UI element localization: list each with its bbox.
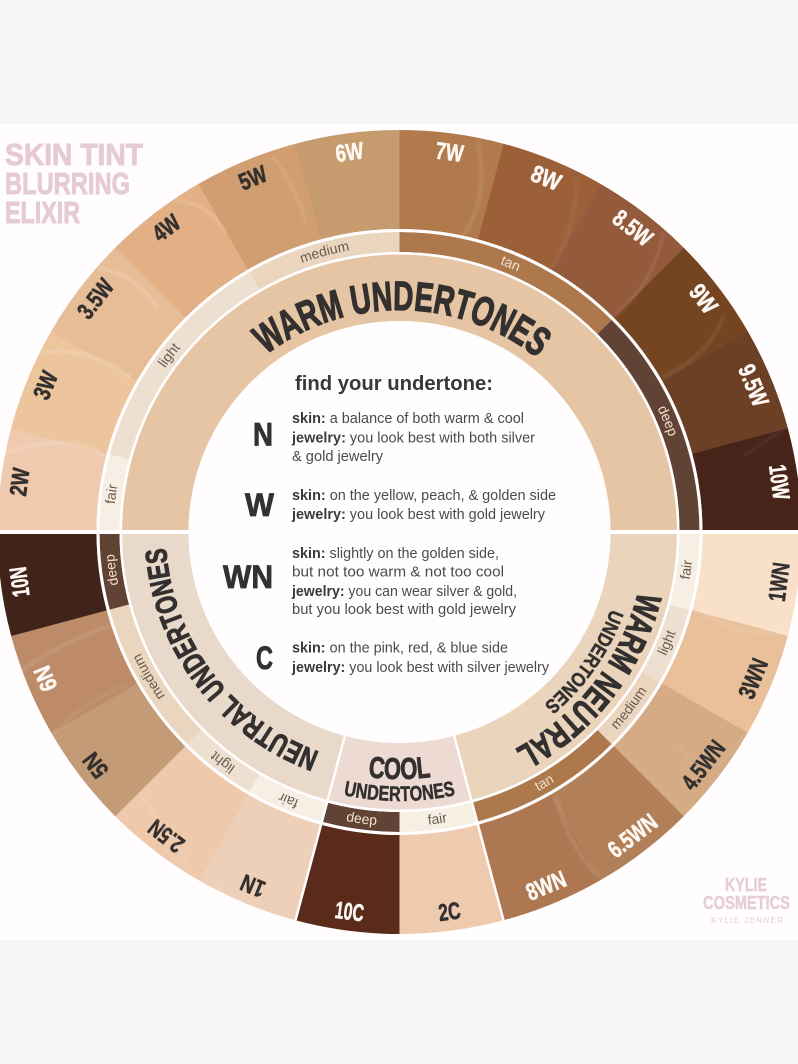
swatch: 6N bbox=[11, 610, 137, 733]
swatch: 2.5N bbox=[115, 746, 248, 880]
swatch: 6.5WN bbox=[551, 746, 684, 880]
swatch: 2C: 2C bbox=[437, 897, 462, 927]
swatch: 6W: 6W bbox=[334, 138, 365, 168]
warm range: tan bbox=[400, 232, 612, 334]
entry: N: N bbox=[253, 416, 273, 452]
swatch: 3.5W: 3.5W bbox=[72, 274, 120, 324]
swatch: 5N: 5N bbox=[78, 747, 114, 783]
warm range: deep bbox=[598, 320, 700, 530]
entry: N: & gold jewelry bbox=[292, 449, 384, 465]
warm neutral range: tan bbox=[473, 730, 612, 822]
swatch: 1N: 1N bbox=[237, 868, 269, 902]
swatch: 3W: 3W bbox=[28, 367, 64, 404]
neutral range: light: light bbox=[210, 751, 235, 774]
swatch: 10C bbox=[295, 825, 400, 934]
swatch: 4W: 4W bbox=[147, 209, 186, 248]
swatch: 9.5W bbox=[662, 331, 788, 454]
panel: cool undertones bbox=[329, 736, 470, 810]
entry: W: W bbox=[245, 487, 275, 523]
swatch: 8.5W: 8.5W bbox=[607, 205, 658, 253]
entry: C: jewelry: you look best with silver jewelry bbox=[291, 660, 550, 676]
cool range: deep bbox=[323, 802, 400, 832]
panel: cool undertones: COOL bbox=[370, 756, 431, 780]
swatch: 7W: 7W bbox=[434, 138, 465, 168]
swatch: 10W bbox=[692, 428, 798, 532]
range bands and undertone rings bbox=[0, 229, 798, 921]
entry: N: jewelry: you look best with both silver bbox=[291, 430, 535, 446]
swatch: 4.5WN: 4.5WN bbox=[676, 735, 731, 795]
brand title: skin tint blurring elixir: SKIN TINT bbox=[5, 137, 143, 172]
swatch: 9W bbox=[614, 248, 748, 380]
swatch: 10N: 10N bbox=[5, 565, 36, 599]
swatch: 5W bbox=[198, 144, 321, 270]
panel: warm undertones bbox=[122, 254, 677, 530]
neutral range: light bbox=[188, 730, 260, 792]
entry: WN: skin: slightly on the golden side, bbox=[292, 546, 499, 562]
panel: warm neutral undertones: UNDERTONES bbox=[546, 611, 624, 714]
warm range: light bbox=[110, 272, 260, 460]
entry: C bbox=[256, 640, 550, 676]
swatch: 3WN bbox=[662, 610, 788, 733]
entry: C: C bbox=[256, 640, 273, 676]
swatch: 2W: 2W bbox=[5, 466, 36, 498]
swatch: 1WN: 1WN bbox=[764, 561, 796, 603]
warm range: deep: deep bbox=[658, 406, 676, 436]
swatch: 6.5WN: 6.5WN bbox=[603, 809, 663, 864]
neutral range: deep bbox=[100, 534, 129, 610]
entry: W: skin: on the yellow, peach, & golden side bbox=[292, 488, 556, 504]
logo: kylie cosmetics: KYLIE JENNER bbox=[711, 916, 783, 925]
swatch: 10C: 10C bbox=[333, 897, 366, 927]
swatch: 8.5W bbox=[551, 184, 684, 318]
swatch: 7W bbox=[400, 130, 504, 239]
color wheel bbox=[0, 130, 798, 934]
entry: C: skin: on the pink, red, & blue side bbox=[292, 640, 508, 656]
swatch: 5N bbox=[51, 684, 185, 816]
neutral range: medium bbox=[110, 604, 202, 744]
entry: W bbox=[245, 487, 556, 523]
heading: find your undertone: bbox=[295, 373, 493, 395]
entry: WN: but not too warm & not too cool bbox=[292, 564, 504, 580]
warm range: medium bbox=[250, 232, 400, 290]
swatch: 9W: 9W bbox=[683, 279, 723, 319]
warm neutral range: tan: tan bbox=[534, 776, 554, 790]
neutral range: fair bbox=[250, 774, 326, 822]
brand title: skin tint blurring elixir: ELIXIR bbox=[5, 195, 80, 230]
warm neutral range: medium bbox=[598, 672, 659, 744]
swatch: 8WN: 8WN bbox=[522, 866, 570, 907]
warm neutral range: fair: fair bbox=[680, 560, 692, 579]
cool range: fair bbox=[400, 803, 476, 832]
warm neutral range: medium: medium bbox=[612, 688, 646, 730]
swatch: 3W bbox=[11, 331, 137, 454]
brand title: skin tint blurring elixir bbox=[5, 137, 143, 230]
warm neutral range: light bbox=[642, 604, 689, 682]
swatch: 8W: 8W bbox=[527, 160, 565, 197]
swatch: 5W: 5W bbox=[235, 161, 271, 196]
swatch: 2C bbox=[400, 825, 504, 934]
swatch: 1WN bbox=[692, 532, 798, 636]
swatch: 8WN bbox=[478, 794, 600, 920]
swatch: 9.5W: 9.5W bbox=[732, 361, 774, 411]
panel: cool undertones: UNDERTONES bbox=[344, 780, 454, 802]
panel: warm neutral undertones: WARM NEUTRAL bbox=[515, 595, 662, 766]
entry: WN: jewelry: you can wear silver & gold, bbox=[291, 584, 517, 600]
brand title: skin tint blurring elixir: BLURRING bbox=[5, 166, 130, 201]
cool range: fair: fair bbox=[428, 812, 446, 824]
swatch: 4.5WN bbox=[614, 684, 748, 816]
warm range: light: light bbox=[157, 343, 180, 368]
swatch: 10W: 10W bbox=[763, 463, 794, 501]
warm neutral range: light: light bbox=[657, 630, 676, 656]
entry: WN: but you look best with gold jewelry bbox=[292, 602, 517, 618]
swatch: 8W bbox=[478, 144, 600, 270]
swatch: 3.5W bbox=[51, 248, 185, 380]
entry: N bbox=[253, 411, 535, 465]
entry: WN bbox=[223, 546, 517, 618]
neutral range: fair: fair bbox=[278, 793, 298, 808]
cool range: deep: deep bbox=[346, 812, 376, 828]
panel: warm undertones: WARM UNDERTONES bbox=[249, 281, 551, 356]
entry: WN: WN bbox=[223, 559, 273, 595]
swatch: 2.5N: 2.5N bbox=[143, 813, 190, 858]
neutral range: deep: deep bbox=[107, 554, 118, 585]
panel: neutral undertones: NEUTRAL UNDERTONES bbox=[145, 548, 319, 772]
swatch: 3WN: 3WN bbox=[733, 655, 774, 703]
logo: kylie cosmetics: KYLIE bbox=[725, 875, 767, 895]
entry: W: jewelry: you look best with gold jewelry bbox=[291, 507, 546, 523]
swatch: 1N bbox=[198, 794, 321, 920]
neutral range: medium: medium bbox=[134, 654, 164, 700]
swatch: 6W bbox=[295, 130, 400, 239]
warm neutral range: fair bbox=[670, 534, 700, 610]
logo: kylie cosmetics bbox=[703, 875, 790, 925]
swatch: 2W bbox=[0, 428, 107, 532]
warm range: fair: fair bbox=[105, 484, 117, 504]
warm range: medium: medium bbox=[300, 243, 349, 263]
warm range: tan: tan bbox=[501, 256, 520, 272]
center guide: find your undertone bbox=[223, 373, 556, 676]
warm range: fair bbox=[100, 454, 129, 530]
panel: warm neutral undertones bbox=[455, 534, 677, 800]
swatch: 4W bbox=[115, 184, 248, 318]
entry: N: skin: a balance of both warm & cool bbox=[292, 411, 524, 427]
swatch: 6N: 6N bbox=[29, 662, 63, 695]
swatch: 10N bbox=[0, 532, 107, 636]
